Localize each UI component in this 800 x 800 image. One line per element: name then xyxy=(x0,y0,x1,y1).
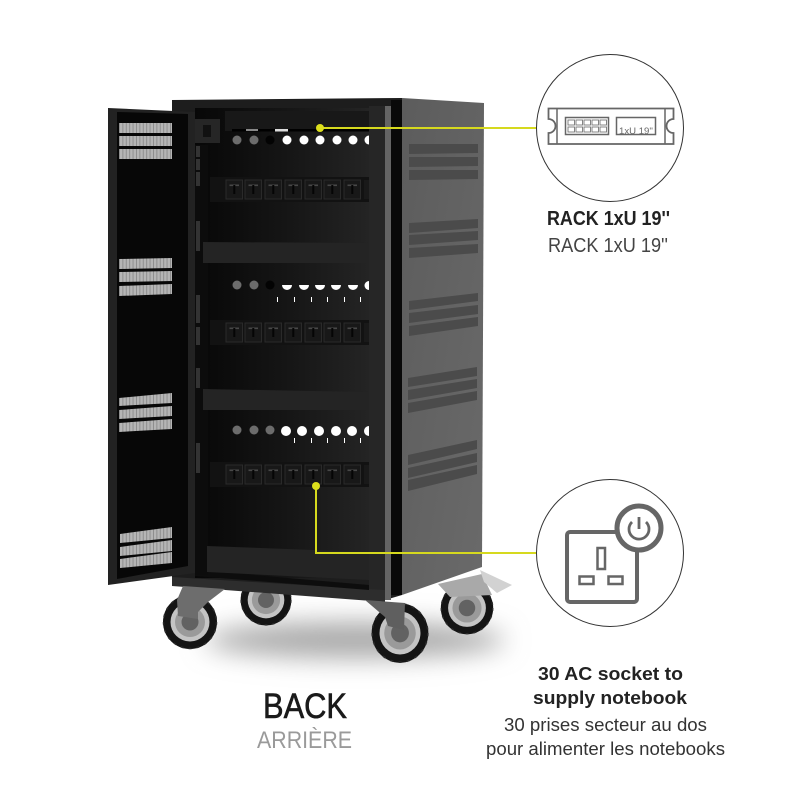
front right edge xyxy=(369,106,385,600)
heading: sockets: supply notebook xyxy=(533,688,688,708)
heading: rack: RACK 1xU 19'' xyxy=(547,208,670,230)
icon: rack 1xU: 1xU 19'' xyxy=(619,126,653,136)
subtitle: ARRIÈRE xyxy=(257,727,352,754)
side vents xyxy=(408,144,478,491)
brake xyxy=(438,574,492,597)
left rack rail xyxy=(195,145,208,575)
hole rows xyxy=(232,136,369,443)
socket strips xyxy=(210,177,369,487)
description: sockets xyxy=(486,715,725,759)
rear wheels xyxy=(241,575,493,634)
floor shadow xyxy=(205,622,505,658)
base rail xyxy=(172,577,385,602)
heading: sockets: 30 AC socket to xyxy=(538,664,683,684)
interior xyxy=(195,108,369,578)
heading: sockets xyxy=(533,664,688,708)
description: sockets: 30 prises secteur au dos xyxy=(504,715,707,735)
casters and front wheels xyxy=(163,570,512,663)
subheading: rack: RACK 1xU 19'' xyxy=(548,235,668,257)
door vents xyxy=(119,123,172,568)
shelves xyxy=(203,242,369,580)
top rack unit xyxy=(195,111,369,143)
cabinet xyxy=(108,54,725,759)
right side panel xyxy=(402,98,484,595)
callout connector: rack xyxy=(316,124,537,132)
icon: rack 1xU xyxy=(536,54,684,202)
callout connector: socket xyxy=(312,482,537,553)
title: BACK xyxy=(263,687,347,726)
open door xyxy=(108,108,195,585)
description: sockets: pour alimenter les notebooks xyxy=(486,739,725,759)
icon: socket with power button xyxy=(536,480,684,626)
body front xyxy=(172,98,402,600)
